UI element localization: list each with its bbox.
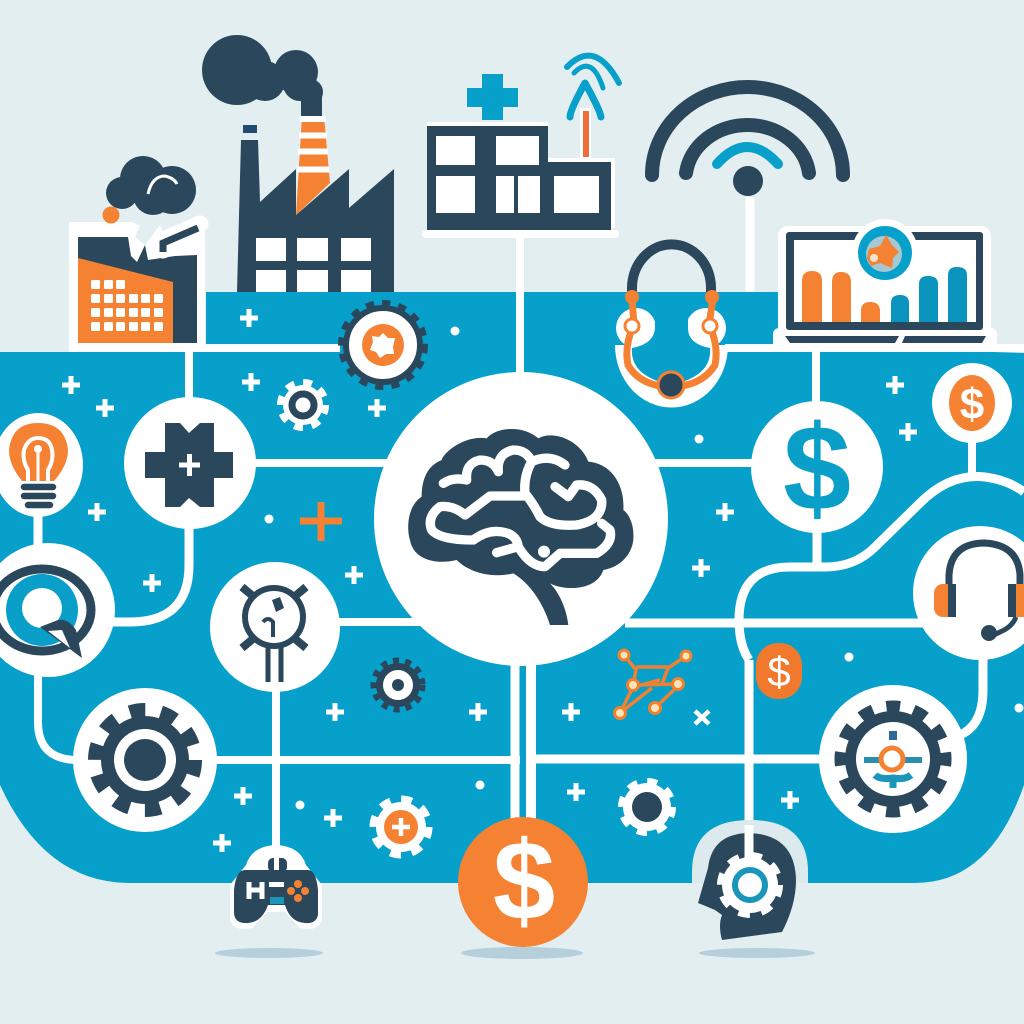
laptop badge	[852, 219, 918, 285]
small x mark	[695, 711, 709, 724]
icon: brain	[408, 429, 633, 625]
icon: teal dollar node: $	[783, 400, 851, 536]
stethoscope inner blue	[632, 300, 710, 382]
orange ember	[102, 206, 120, 224]
icon: large orange dollar coin	[458, 817, 588, 947]
bulb base	[24, 487, 53, 505]
chimney white stripes	[297, 119, 329, 170]
icon: headset node	[913, 526, 1024, 660]
icon: stethoscope	[615, 244, 728, 408]
icon: analytics laptop	[773, 219, 997, 348]
small factory smoke	[106, 156, 196, 215]
antenna arch	[570, 83, 601, 117]
central brain node	[374, 372, 668, 666]
orange plus	[300, 502, 342, 541]
icon: small dollar badge: $	[960, 380, 984, 429]
scattered plus signs	[62, 309, 917, 852]
orange striped chimney	[296, 116, 330, 215]
icon: small factory	[69, 156, 205, 352]
icon: wifi signal	[652, 87, 843, 196]
panel: blue network field	[0, 292, 1024, 883]
factory windows grid	[256, 238, 371, 292]
chimney cap	[243, 125, 257, 133]
connector lines	[38, 197, 1024, 860]
stethoscope chest piece	[658, 372, 684, 398]
icon: large left gear node	[73, 688, 217, 832]
icon: right gear node	[819, 685, 967, 833]
d-pad glyph	[249, 882, 262, 899]
icon: navy mid gear	[374, 661, 422, 709]
smoke highlight	[148, 176, 177, 194]
icon: head with gear	[692, 820, 808, 940]
icon: chat bubble node	[0, 543, 115, 677]
factory smoke	[202, 35, 323, 116]
controller buttons	[287, 880, 309, 902]
ground shadows	[215, 947, 815, 959]
antenna signal arcs	[567, 56, 619, 83]
scattered dots	[264, 326, 1024, 810]
icon: orange network graph	[614, 650, 691, 718]
icon: game controller	[230, 845, 322, 929]
bar chart	[802, 267, 967, 322]
icon: orange small gear	[374, 800, 428, 854]
icon: small dollar badge	[932, 363, 1012, 443]
icon: navy small gear	[622, 782, 672, 832]
medical cross	[467, 74, 518, 120]
icon: large orange dollar coin: $	[493, 818, 555, 943]
small factory pipe	[163, 224, 200, 250]
icon: small white gear	[281, 383, 325, 427]
icon: small orange dollar: $	[767, 648, 791, 695]
small factory pipe inner	[163, 228, 198, 252]
factory windows	[91, 280, 163, 331]
icon: small orange dollar	[756, 643, 802, 699]
icon: teal dollar node	[751, 400, 883, 536]
factory body	[237, 140, 394, 292]
icon: light bulb node	[0, 413, 83, 517]
icon: top orange gear	[342, 304, 424, 386]
icon: puzzle cross node	[124, 397, 256, 529]
icon: hospital building	[422, 56, 619, 238]
icon: large factory	[202, 35, 394, 292]
icon: circuit bulb node	[210, 562, 340, 692]
